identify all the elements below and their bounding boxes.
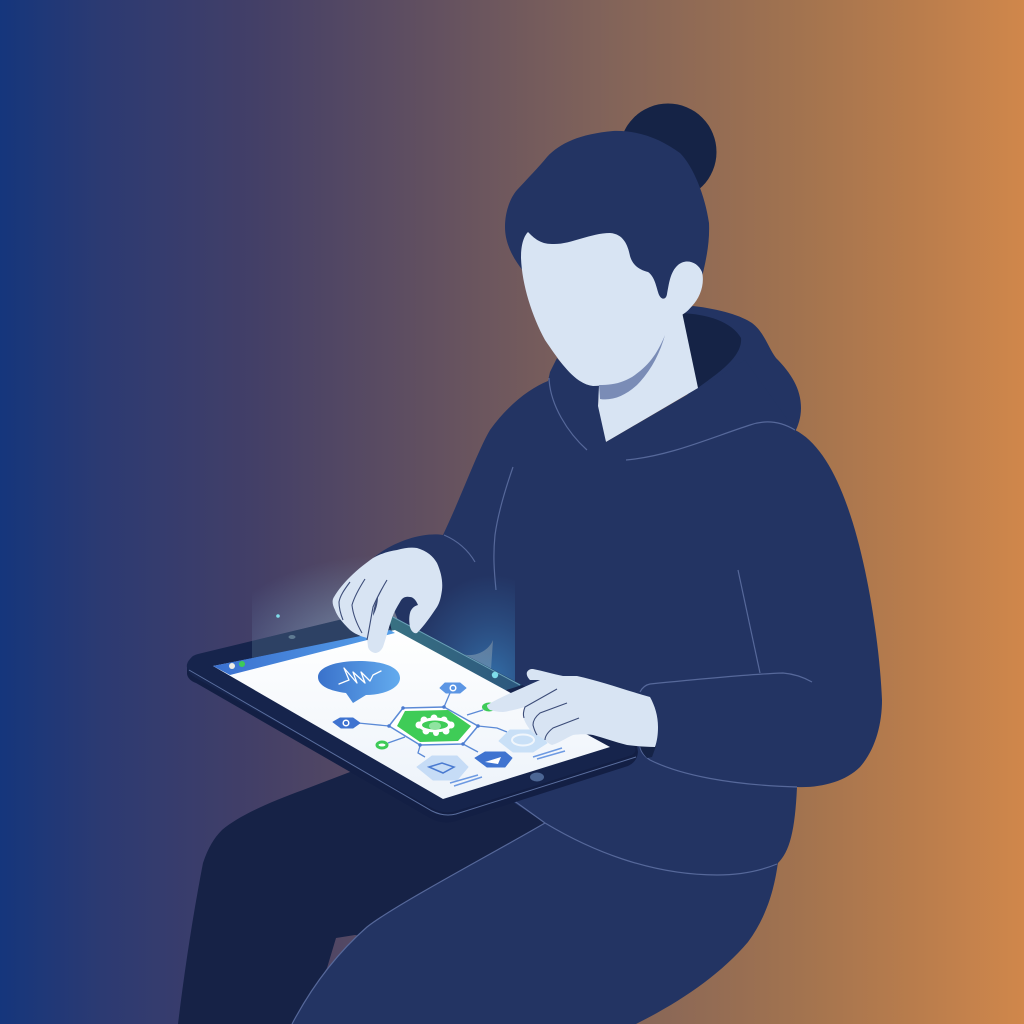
hair bun bbox=[620, 104, 716, 200]
text lines bottom bbox=[450, 775, 482, 786]
bezel glow upper right bbox=[388, 614, 522, 692]
bezel rim light bbox=[393, 617, 520, 685]
neck bbox=[598, 312, 698, 442]
sleeve cuff shadow bbox=[640, 746, 656, 758]
hoodie hood back bbox=[680, 306, 801, 432]
sparkle dot right bbox=[492, 672, 498, 678]
tablet bbox=[187, 611, 638, 822]
bezel highlight line bbox=[189, 670, 636, 815]
left hand bbox=[333, 548, 442, 653]
blue play hexagon node bbox=[475, 752, 512, 767]
right hand bbox=[487, 669, 658, 747]
hair bbox=[505, 131, 709, 300]
text lines right bbox=[533, 748, 565, 759]
chat bubble with waveform bbox=[318, 661, 400, 703]
tablet screen bbox=[213, 630, 610, 799]
sparkle dot left bbox=[276, 614, 280, 618]
window dots bbox=[229, 661, 245, 669]
central hexagon node with gear bbox=[389, 707, 478, 745]
hood inner shadow bbox=[660, 313, 741, 400]
right hand finger lines bbox=[523, 689, 579, 740]
small blue node left bbox=[333, 718, 360, 728]
home button bbox=[530, 772, 544, 782]
left hand finger shadow bbox=[373, 596, 378, 616]
network connectors bbox=[358, 693, 507, 757]
screen top bar bbox=[213, 630, 395, 675]
tablet edge thickness bbox=[187, 664, 638, 822]
light hexagon node bottom bbox=[417, 756, 468, 780]
small blue node top bbox=[440, 683, 466, 693]
green ring node bbox=[377, 742, 387, 748]
hoodie seam lines bbox=[292, 378, 812, 1024]
hoodie torso and arms bbox=[373, 358, 882, 875]
bezel glow upper left bbox=[252, 612, 392, 658]
green touch dot bbox=[482, 702, 496, 712]
screen glow bbox=[252, 555, 515, 690]
camera dot bbox=[288, 635, 296, 639]
blue glow on hoodie bbox=[405, 575, 515, 690]
tablet bezel bbox=[187, 611, 636, 812]
face and ear bbox=[521, 232, 703, 386]
dark far leg bbox=[178, 772, 546, 1024]
chin shadow bbox=[599, 335, 665, 399]
light hexagon node right bbox=[499, 730, 547, 752]
figure bbox=[178, 104, 882, 1024]
left hand finger lines bbox=[339, 579, 387, 640]
near leg bbox=[292, 823, 778, 1024]
